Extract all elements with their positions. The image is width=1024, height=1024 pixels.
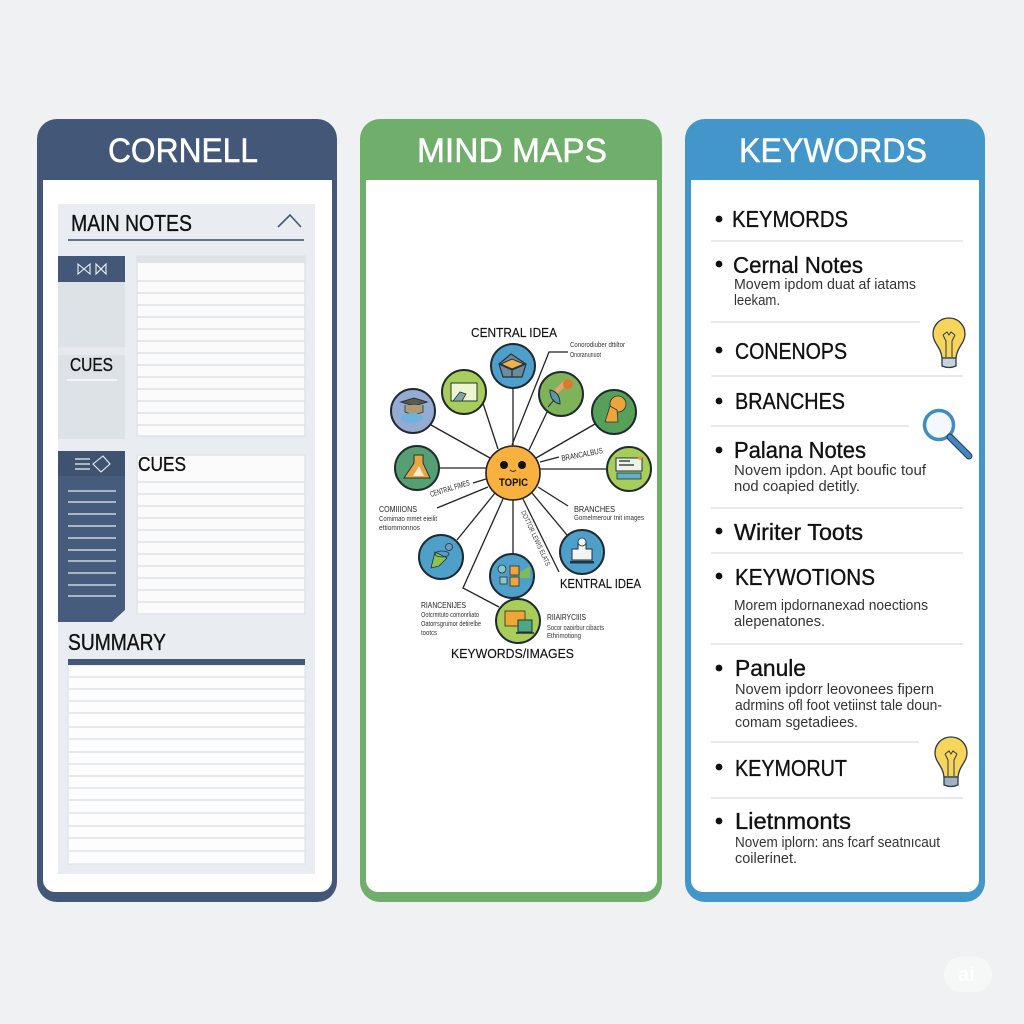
node: cards (496, 599, 540, 643)
item: Cernal Notes: Movem ipdom duat af iatams (734, 276, 916, 293)
item: Palana Notes: Palana Notes (734, 437, 866, 463)
label: lower-left note: tootcs (421, 630, 437, 637)
node: building (560, 530, 604, 574)
node: flask (395, 446, 439, 490)
node: dashboard (607, 447, 651, 491)
node: head (592, 390, 636, 434)
notes box 2: CUES (138, 454, 186, 476)
watermark: ai (958, 964, 975, 986)
item: Panule: Novem ipdorr leovonees fipern (735, 681, 934, 698)
item: Lietnmonts (735, 808, 941, 867)
summary: SUMMARY (68, 629, 166, 655)
item: Lietnmonts: coilerinet. (735, 850, 797, 867)
item: Cernal Notes (733, 252, 916, 309)
cue column 1: CUES (70, 355, 113, 375)
heading: Cornell: CORNELL (108, 132, 258, 170)
label: diagonal note: DOTTOR LEWIS ELATS (519, 510, 551, 567)
notes box 2 (137, 454, 305, 614)
item: Panule: adrmins ofl foot vetiinst tale doun- (735, 697, 942, 714)
item: Keymords: KEYMORDS (732, 206, 848, 232)
label: top-right note: Conorodiuber dttiltor (570, 342, 626, 349)
panel: Keywords (685, 119, 985, 902)
item: Keywotions: alepenatones. (734, 613, 825, 630)
label: lower-left note (421, 601, 481, 637)
label: keywords/images: KEYWORDS/IMAGES (451, 646, 574, 661)
watermark (944, 957, 992, 992)
node: browser (442, 370, 486, 414)
node: figure (419, 535, 463, 579)
cue column 2 (58, 451, 125, 622)
heading: main notes: MAIN NOTES (71, 210, 192, 236)
item: Cernal Notes: leekam. (734, 292, 780, 309)
item: Lietnmonts: Lietnmonts (735, 808, 851, 834)
icon: light bulb 1 (933, 318, 965, 368)
heading: Keywords: KEYWORDS (739, 132, 927, 170)
mind map connectors (431, 352, 607, 607)
cue column 1 (58, 256, 125, 439)
item: Panule (735, 655, 942, 731)
item: Palana Notes: nod coapied detitly. (734, 478, 860, 495)
label: central rotated: CENTRAL FIMES (429, 478, 471, 499)
item: Conenops: CONENOPS (735, 338, 847, 364)
panel: Mind Maps (360, 119, 662, 902)
central topic: TOPIC (499, 477, 528, 489)
label: lower-left note: Oatorrsgrumor detirelbe (421, 621, 481, 628)
label: top-right note: Onoranunuot (570, 352, 601, 359)
label: lower-left note: Ootcrmtuto comonrliato (421, 612, 479, 619)
label: top-right note (570, 342, 626, 359)
item: Keywotions (734, 564, 928, 630)
item: Palana Notes (734, 437, 927, 495)
node: book (491, 344, 535, 388)
label: branches note: Gomelmerour tnit images (574, 515, 644, 522)
label: left branch note: ettiommonnos (379, 525, 420, 532)
label: branch rotated: BRANCALBUS (561, 446, 604, 463)
label: left branch note: Comimao mmet eieilit (379, 516, 437, 523)
item: Cernal Notes: Cernal Notes (733, 252, 863, 278)
dividers and bullets (711, 216, 963, 824)
label: lower-right note (547, 613, 604, 640)
item: Wiriter Toots: Wiriter Toots (734, 519, 863, 545)
label: branches note: BRANCHES (574, 505, 615, 514)
label: left branch note (379, 505, 437, 532)
item: Branches: BRANCHES (735, 388, 845, 414)
label: lower-right note: Socor oaoirbur cibacts (547, 625, 604, 632)
icon: chevron (278, 215, 301, 227)
label: kentral idea: KENTRAL IDEA (560, 576, 641, 591)
item: Keywotions: Morem ipdornanexad noections (734, 597, 928, 614)
notes box 1 (137, 256, 305, 436)
label: branches note (574, 505, 644, 522)
label: lower-right note: Ethrimotiong (547, 633, 581, 640)
item: Palana Notes: Novem ipdon. Apt boufic touf (734, 462, 927, 479)
item: Keywotions: KEYWOTIONS (735, 564, 875, 590)
summary (68, 629, 305, 864)
label: lower-right note: RIIAIRYCIIIS (547, 613, 586, 622)
icon: light bulb 2 (935, 737, 967, 786)
icon: magnifier (924, 410, 969, 456)
label: lower-left note: RIANCENIJES (421, 601, 466, 610)
node: graduate (391, 389, 435, 433)
central topic (486, 446, 540, 500)
label: central idea: CENTRAL IDEA (471, 325, 557, 340)
panel: Cornell (37, 119, 337, 902)
item: Keymorut: KEYMORUT (735, 755, 847, 781)
heading: Mind Maps: MIND MAPS (417, 132, 607, 170)
node: pushpin (539, 372, 583, 416)
node: blocks (490, 554, 534, 598)
label: left branch note: COMIIIONS (379, 505, 417, 514)
item: Lietnmonts: Novem iplorn: ans fcarf seatnıcaut (735, 834, 941, 851)
item: Panule: Panule (735, 655, 806, 681)
item: Panule: comam sgetadiees. (735, 714, 858, 731)
